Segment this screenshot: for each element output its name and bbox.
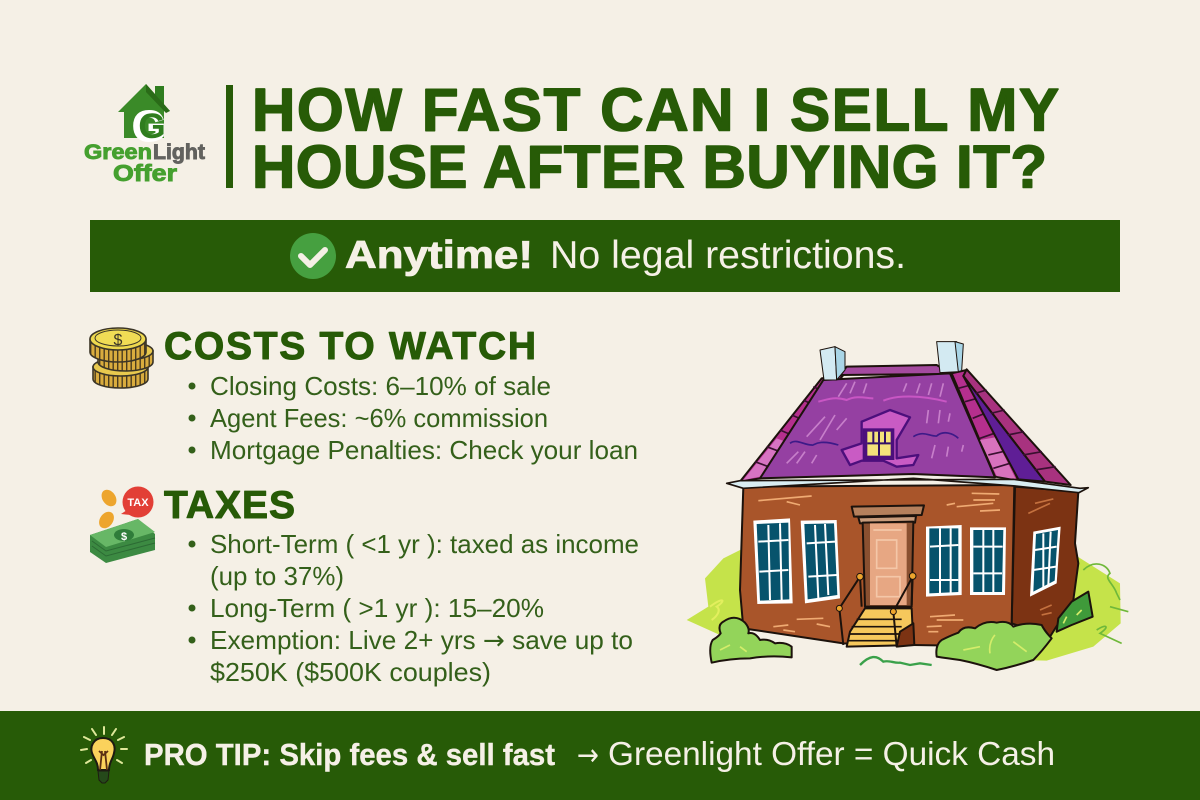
footer text <box>144 735 1055 773</box>
roof main <box>760 373 995 478</box>
icon: logo house: G <box>138 107 166 146</box>
logo: GreenLight Offer <box>84 84 205 186</box>
windows <box>753 518 1061 604</box>
icon: check mark <box>290 233 336 279</box>
banner text: No legal restrictions. <box>550 234 906 277</box>
illustration: house <box>687 342 1128 670</box>
front wall <box>740 485 1014 647</box>
roof ridge <box>840 365 952 375</box>
heading: costs to watch: COSTS TO WATCH <box>164 325 536 368</box>
stairs and railings <box>836 573 916 647</box>
list: taxes <box>188 529 639 687</box>
banner: answer <box>90 220 1120 292</box>
icon: logo house <box>118 84 170 149</box>
icon: tax and money: TAX <box>127 497 149 509</box>
icon: gold coins: $ <box>114 332 123 349</box>
title divider <box>226 85 233 188</box>
list: costs: Closing Costs: 6–10% of sale <box>210 371 551 401</box>
icon: tax and money: $ <box>121 531 127 543</box>
lawn <box>687 548 747 635</box>
bushes <box>710 592 1093 670</box>
roof side tiles <box>952 370 1018 480</box>
door <box>852 505 924 607</box>
dormer <box>842 410 918 467</box>
banner text <box>345 234 906 277</box>
list: costs: Agent Fees: ~6% commission <box>210 403 548 433</box>
icon: logo house: G <box>133 103 165 149</box>
footer text: PRO TIP: Skip fees & sell fast <box>144 737 555 772</box>
footer text: Greenlight Offer = Quick Cash <box>608 735 1055 772</box>
list: taxes: $250K ($500K couples) <box>210 657 491 687</box>
title: HOUSE AFTER BUYING IT? <box>252 134 1047 200</box>
icon: tax and money <box>90 486 155 563</box>
title <box>252 76 1059 200</box>
banner text: Anytime! <box>345 234 533 277</box>
footer text: → <box>577 738 599 773</box>
roof highlights <box>787 382 963 463</box>
list: taxes: Short-Term ( <1 yr ): taxed as income <box>210 529 639 559</box>
list: costs: Mortgage Penalties: Check your loan <box>210 435 638 465</box>
side wall <box>1012 487 1078 637</box>
brick marks <box>758 493 1053 632</box>
footer band <box>0 711 1200 800</box>
list: taxes: (up to 37%) <box>210 561 344 591</box>
list: costs <box>188 371 638 465</box>
grass <box>860 657 932 665</box>
logo wordmark: Light <box>153 141 205 164</box>
logo wordmark <box>84 141 205 186</box>
list: taxes: Exemption: Live 2+ yrs → save up to <box>210 625 633 656</box>
chimneys <box>820 342 963 380</box>
icon: gold coins <box>90 328 153 388</box>
logo wordmark: Green <box>84 141 152 164</box>
eaves <box>727 478 1088 493</box>
icon: light bulb <box>81 727 127 783</box>
heading: taxes: TAXES <box>164 484 295 527</box>
title: HOW FAST CAN I SELL MY <box>252 76 1059 144</box>
roof tiles left <box>740 375 843 482</box>
list: taxes: Long-Term ( >1 yr ): 15–20% <box>210 593 544 623</box>
logo wordmark: Offer <box>113 160 177 186</box>
